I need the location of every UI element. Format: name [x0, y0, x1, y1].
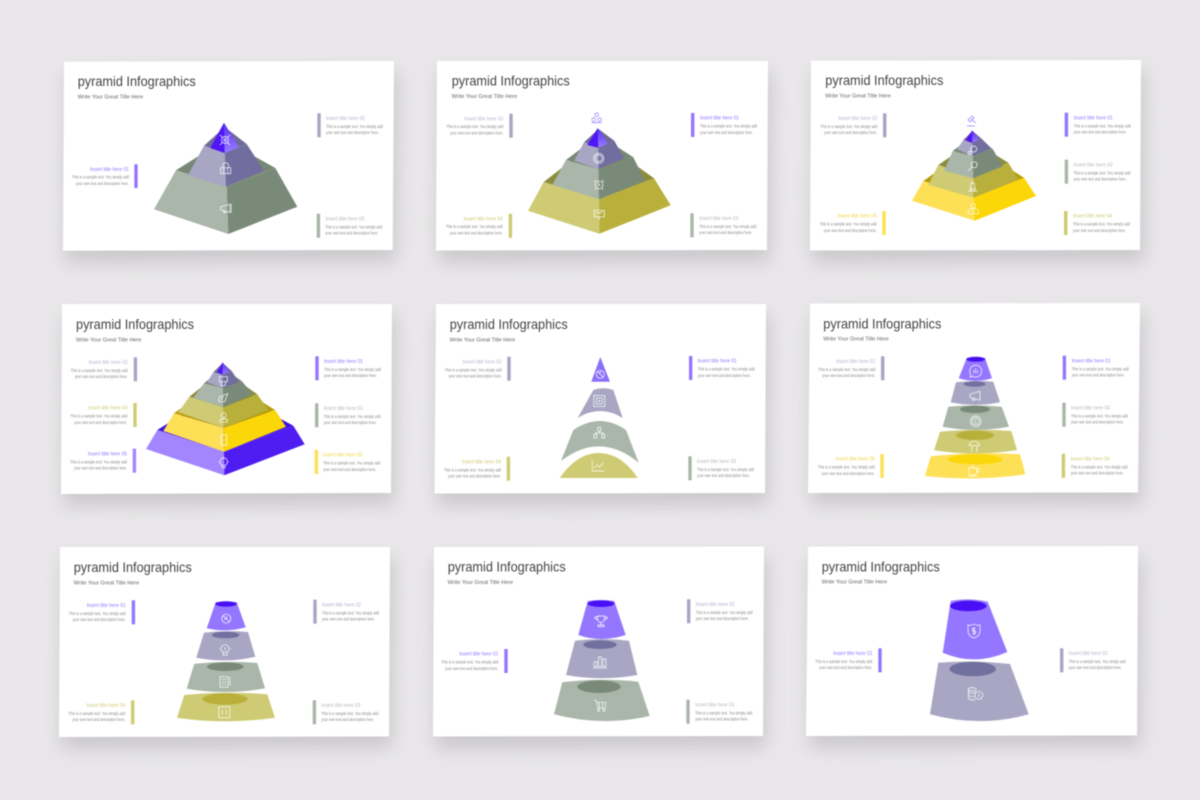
icon: film box: [219, 707, 230, 718]
callout 04: [1064, 211, 1131, 235]
icon: bulb gear: [219, 457, 229, 468]
callout 02: [818, 356, 884, 380]
pyramid chart: [154, 123, 297, 234]
callout 03: your own text and description here.: [695, 716, 748, 722]
callout 01: [1063, 356, 1129, 380]
callout 01: This is a sample text. You simply add: [324, 367, 382, 372]
callout 03: Insert title here 03: [1071, 405, 1110, 411]
callout 03: your own text and description here.: [321, 717, 374, 722]
icon: hourglass: [221, 435, 227, 445]
callout 04: Insert title here 04: [1073, 214, 1112, 220]
callout 01: your own text and description here.: [700, 130, 753, 135]
callout 01: [72, 164, 138, 188]
callout 01: Insert title here 01: [87, 603, 126, 609]
icon: stamp: [220, 413, 227, 422]
callout 03: [313, 700, 379, 724]
callout 03: [317, 214, 383, 238]
callout 02: Insert title here 02: [838, 116, 878, 122]
callout 04: This is a sample text. You simply add: [1071, 464, 1128, 469]
callout 01: Insert title here 01: [698, 359, 737, 365]
callout 02: your own text and description here.: [824, 130, 877, 135]
callout 02: [317, 113, 384, 137]
icon: bar chart: [593, 657, 607, 668]
callout 01: Insert title here 01: [1072, 358, 1111, 364]
stacked cone chart: [930, 599, 1029, 721]
callout 04: [68, 700, 134, 724]
panel: slide 3, five-tier pyramid: [810, 60, 1145, 263]
callout 02: This is a sample text. You simply add: [445, 367, 502, 372]
callout 01: This is a sample text. You simply add: [815, 659, 873, 664]
icon: safe: [594, 396, 605, 406]
icon: refresh: [596, 370, 604, 378]
callout 05: your own text and description here.: [822, 471, 875, 476]
callout 03: Insert title here 03: [321, 703, 361, 709]
callout 02: Insert title here 02: [1069, 651, 1108, 657]
callout 03: Insert title here 03: [695, 702, 735, 708]
callout 02: your own text and description here.: [326, 130, 379, 135]
callout 02: This is a sample text. You simply add: [322, 610, 380, 615]
icon: umbrella: [969, 441, 979, 452]
icon: cube tree: [219, 377, 227, 386]
callout 02: [1060, 648, 1126, 672]
icon: shopping cart: [594, 700, 606, 711]
subtitle: Write Your Great Title Here: [452, 94, 517, 100]
callout 03: your own text and description here.: [324, 420, 377, 425]
subtitle: Write Your Great Title Here: [78, 94, 143, 100]
curved pyramid chart: [560, 357, 639, 478]
title: pyramid Infographics: [78, 73, 196, 89]
callout 03: [315, 403, 381, 427]
callout 03: your own text and description here.: [1071, 420, 1124, 424]
title: pyramid Infographics: [822, 558, 940, 574]
callout 01: your own text and description here.: [445, 666, 498, 671]
icon: trophy: [595, 616, 607, 626]
callout 01: [691, 113, 758, 137]
callout 04: [1062, 454, 1128, 478]
title: pyramid Infographics: [823, 315, 941, 331]
callout 05: This is a sample text. You simply add: [820, 222, 877, 227]
callout 02: your own text and description here.: [1069, 665, 1122, 670]
title: pyramid Infographics: [450, 316, 568, 332]
callout 02: [313, 600, 380, 624]
callout 05: [70, 449, 136, 473]
callout 03: your own text and description here.: [697, 473, 750, 478]
callout 03: Insert title here 03: [324, 406, 363, 412]
callout 02: This is a sample text. You simply add: [71, 368, 128, 373]
callout 01: Insert title here 01: [459, 652, 499, 658]
callout 04: [444, 457, 510, 481]
callout 05: Insert title here 05: [88, 451, 127, 457]
icon: chat: [970, 365, 982, 377]
callout 02: your own text and description here.: [322, 616, 375, 622]
icon: coin: [970, 416, 981, 427]
callout 05: [818, 454, 884, 478]
panel: slide 7, four-tier stacked cone: [59, 547, 394, 749]
callout 02: your own text and description here.: [696, 616, 749, 621]
callout 03: This is a sample text. You simply add: [695, 710, 753, 715]
callout 02: [71, 357, 137, 381]
callout 03: [688, 456, 755, 480]
callout 03: your own text and description here.: [325, 231, 378, 236]
callout 03: Insert title here 03: [1074, 162, 1113, 168]
subtitle: Write Your Great Title Here: [448, 580, 513, 586]
title: pyramid Infographics: [825, 72, 943, 88]
callout 03: your own text and description here.: [1074, 176, 1126, 182]
callout 02: your own text and description here.: [449, 374, 502, 378]
callout 04: [446, 214, 512, 238]
callout 05: your own text and description here.: [824, 228, 877, 233]
callout 05: Insert title here 05: [838, 214, 877, 220]
callout 04: your own text and description here.: [1071, 470, 1124, 476]
callout 05: This is a sample text. You simply add: [70, 459, 128, 464]
title: pyramid Infographics: [76, 316, 194, 332]
callout 04: Insert title here 04: [1071, 456, 1110, 462]
callout 01: [441, 649, 508, 673]
stacked cone chart: [554, 600, 650, 721]
callout 04: [70, 403, 137, 427]
icon: alarm: [594, 180, 604, 190]
callout 01: Insert title here 01: [90, 167, 129, 173]
callout 04: This is a sample text. You simply add: [68, 711, 126, 716]
panel: slide 6, five-tier stacked cone: [808, 303, 1144, 505]
callout 06: [315, 450, 381, 474]
icon: rocket: [219, 394, 228, 402]
icon: target: [220, 135, 230, 145]
callout 01: Insert title here 01: [833, 651, 873, 657]
icon: line chart: [592, 460, 604, 471]
callout 04: Insert title here 04: [86, 703, 126, 709]
pyramid chart: [146, 362, 305, 475]
subtitle: Write Your Great Title Here: [822, 580, 887, 586]
callout 01: [1065, 113, 1131, 137]
subtitle: Write Your Great Title Here: [74, 580, 139, 586]
callout 02: Insert title here 02: [89, 360, 128, 366]
subtitle: Write Your Great Title Here: [76, 337, 142, 343]
icon: magnifier: [968, 162, 977, 171]
callout 04: This is a sample text. You simply add: [1073, 222, 1131, 227]
title: pyramid Infographics: [452, 72, 570, 88]
callout 04: This is a sample text. You simply add: [444, 467, 502, 472]
callout 01: your own text and description here.: [76, 181, 129, 186]
panel: slide 4, six-tier pyramid: [61, 304, 396, 506]
callout 04: your own text and description here.: [74, 420, 127, 425]
callout 01: your own text and description here.: [698, 373, 751, 378]
callout 06: This is a sample text. You simply add: [323, 461, 381, 466]
callout 04: Insert title here 04: [464, 216, 503, 222]
callout 03: Insert title here 03: [697, 459, 736, 465]
callout 01: [689, 356, 755, 380]
callout 01: This is a sample text. You simply add: [1074, 123, 1131, 128]
callout 02: This is a sample text. You simply add: [446, 124, 504, 129]
title: pyramid Infographics: [448, 559, 566, 575]
icon: person: [968, 203, 978, 214]
callout 03: your own text and description here.: [699, 230, 752, 235]
icon: shield dollar: [968, 624, 980, 638]
callout 03: This is a sample text. You simply add: [321, 711, 379, 716]
callout 04: your own text and description here.: [72, 717, 125, 722]
title: pyramid Infographics: [74, 559, 192, 575]
icon: idea bulb: [219, 645, 231, 655]
panel: slide 9, two-tier stacked cone: [806, 546, 1142, 748]
callout 01: This is a sample text. You simply add: [72, 175, 130, 180]
subtitle: Write Your Great Title Here: [823, 337, 889, 343]
icon: coin: [594, 153, 604, 163]
callout 04: This is a sample text. You simply add: [446, 224, 503, 229]
callout 02: Insert title here 02: [696, 602, 735, 608]
callout 02: This is a sample text. You simply add: [818, 367, 876, 372]
pyramid chart: [912, 116, 1036, 221]
callout 01: your own text and description here.: [819, 665, 872, 670]
callout 02: This is a sample text. You simply add: [326, 124, 384, 129]
icon: coffee cup: [968, 465, 979, 476]
icon: gear arrows: [222, 614, 231, 623]
callout 04: your own text and description here.: [450, 230, 503, 236]
callout 02: your own text and description here.: [822, 373, 875, 378]
callout 05: your own text and description here.: [74, 466, 127, 470]
callout 03: [686, 700, 753, 724]
callout 03: This is a sample text. You simply add: [324, 414, 381, 419]
callout 01: your own text and description here.: [1074, 130, 1127, 134]
callout 04: Insert title here 04: [462, 459, 501, 465]
icon: megaphone: [970, 391, 980, 400]
callout 01: Insert title here 01: [324, 359, 363, 365]
panel: slide 2, four-tier pyramid: [436, 61, 772, 263]
callout 03: This is a sample text. You simply add: [699, 224, 757, 229]
callout 01: This is a sample text. You simply add: [698, 367, 755, 372]
icon: presentation: [594, 210, 604, 220]
callout 05: Insert title here 05: [836, 457, 875, 463]
callout 01: This is a sample text. You simply add: [441, 660, 499, 665]
callout 03: This is a sample text. You simply add: [325, 224, 383, 229]
callout 02: [445, 357, 511, 381]
callout 05: [820, 211, 886, 235]
icon: coins: [968, 688, 983, 700]
icon: gear: [968, 146, 977, 155]
callout 01: This is a sample text. You simply add: [1072, 366, 1129, 371]
callout 06: Insert title here 06: [323, 453, 363, 459]
callout 03: This is a sample text. You simply add: [1074, 170, 1131, 175]
callout 02: [687, 599, 753, 623]
callout 01: your own text and description here.: [324, 373, 377, 378]
icon: bank lock: [221, 163, 231, 174]
callout 02: [820, 113, 886, 137]
callout 01: your own text and description here.: [73, 617, 126, 622]
icon: team: [592, 113, 602, 123]
stacked cone chart: [925, 357, 1025, 478]
callout 03: This is a sample text. You simply add: [697, 467, 755, 472]
callout 03: This is a sample text. You simply add: [1071, 413, 1129, 418]
callout 02: Insert title here 02: [464, 116, 504, 122]
subtitle: Write Your Great Title Here: [450, 337, 515, 343]
icon: network: [594, 428, 605, 438]
callout 01: This is a sample text. You simply add: [69, 611, 126, 616]
stacked cone chart: [177, 601, 275, 721]
callout 05: This is a sample text. You simply add: [818, 465, 875, 470]
icon: lighthouse: [968, 180, 977, 191]
callout 03: Insert title here 03: [699, 216, 739, 222]
panel: slide 1, three-tier pyramid: [63, 61, 398, 263]
callout 02: This is a sample text. You simply add: [820, 124, 878, 129]
callout 04: your own text and description here.: [448, 474, 501, 478]
callout 02: Insert title here 02: [463, 359, 502, 365]
icon: megaphone: [221, 204, 231, 213]
callout 02: your own text and description here.: [75, 374, 128, 379]
callout 01: [69, 600, 135, 624]
icon: gavel: [967, 116, 976, 126]
callout 02: your own text and description here.: [450, 130, 503, 136]
callout 04: your own text and description here.: [1073, 228, 1126, 233]
callout 03: [1062, 403, 1129, 427]
callout 01: This is a sample text. You simply add: [700, 124, 758, 129]
panel: slide 5, curved-tier pyramid: [434, 304, 770, 506]
callout 01: [315, 356, 382, 380]
callout 01: Insert title here 01: [1074, 115, 1113, 121]
icon: notes: [220, 677, 230, 687]
callout 02: This is a sample text. You simply add: [1069, 659, 1126, 664]
callout 02: Insert title here 02: [326, 116, 365, 122]
callout 04: This is a sample text. You simply add: [70, 414, 128, 419]
callout 02: This is a sample text. You simply add: [696, 610, 753, 615]
callout 03: Insert title here 03: [325, 216, 365, 222]
callout 02: [446, 114, 513, 138]
callout 02: Insert title here 02: [836, 359, 876, 365]
callout 03: [690, 213, 757, 237]
callout 01: Insert title here 01: [700, 116, 739, 122]
callout 01: your own text and description here.: [1072, 372, 1125, 378]
callout 04: Insert title here 04: [88, 406, 128, 412]
panel: slide 8, three-tier stacked cone: [433, 546, 768, 749]
callout 06: your own text and description here.: [323, 467, 376, 472]
pyramid chart: [528, 113, 671, 234]
callout 01: [815, 648, 882, 672]
subtitle: Write Your Great Title Here: [825, 93, 891, 99]
callout 02: Insert title here 02: [322, 602, 361, 608]
callout 03: [1065, 160, 1131, 184]
